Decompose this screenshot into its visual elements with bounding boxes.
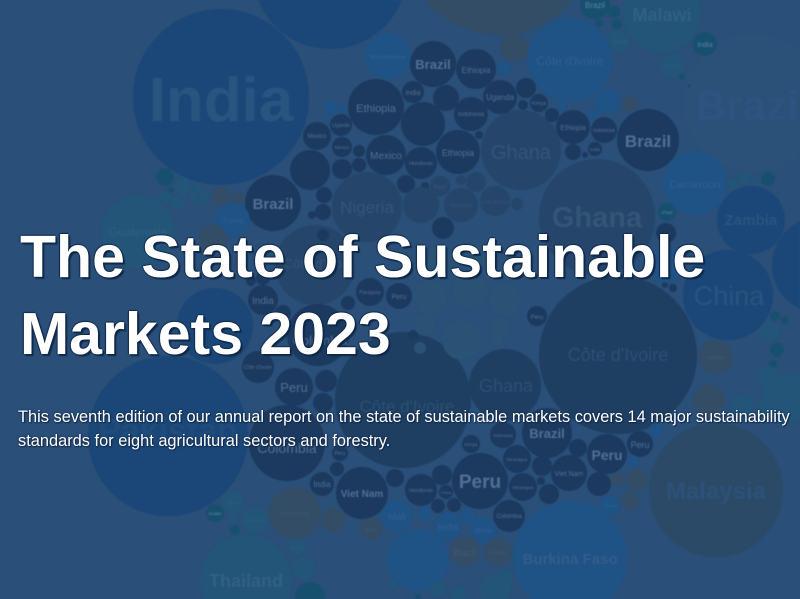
intro paragraph: standards for eight agricultural sectors and forestry. xyxy=(18,432,390,450)
bubble: India small: India xyxy=(405,90,421,97)
olive bubbles xyxy=(199,34,733,566)
bubble: Viet Nam xyxy=(336,467,388,519)
bubble: Ethiopia middle xyxy=(436,130,480,174)
bubble: India large xyxy=(133,9,309,185)
bubble: Peru grey: Peru xyxy=(434,185,446,191)
bubble: Malaysia: Malaysia xyxy=(666,478,767,505)
bubble: Ghana upper: Ghana xyxy=(491,142,552,164)
bubble: Peru tiny right: Peru xyxy=(630,440,650,450)
bubble: Thailand xyxy=(200,534,292,599)
bubble: Mexico small left: Mexico xyxy=(307,134,327,140)
bubble: Ghana large xyxy=(539,159,655,275)
bubble: Turkey: Turkey xyxy=(222,218,244,225)
bubble: olive Brazil xyxy=(450,536,480,566)
bubble: olive Colombia xyxy=(699,340,733,374)
bubble: Chad xyxy=(658,203,676,221)
bubble: Peru lower right xyxy=(587,434,627,474)
bubble: India tiny xyxy=(588,142,602,156)
bubble: Nicaragua lower xyxy=(509,473,537,501)
bubble: Indonesia lower xyxy=(490,422,516,448)
bubble: grey-teal small xyxy=(222,491,244,513)
bubble: Ghana lower: Ghana xyxy=(479,376,534,396)
bubble: Brazil right: Brazil xyxy=(625,132,671,151)
bubble: Côte d'Ivoire upper: Côte d'Ivoire xyxy=(536,54,604,68)
bubble: Ghana small: Ghana xyxy=(603,503,617,508)
bubble: Indonesia: Indonesia xyxy=(458,112,485,118)
bubble: Colombia lower: Colombia xyxy=(257,440,317,456)
bubble: Peru right middle xyxy=(527,306,547,326)
bubble: Kenya lower xyxy=(462,435,480,453)
bubble: Indonesia grey: Indonesia xyxy=(450,203,472,209)
bubble: Brazil teal: Brazil xyxy=(585,1,605,10)
bubble: Brazil lower xyxy=(522,408,572,458)
bubble: Nicaragua xyxy=(503,445,531,473)
bubble: India large: India xyxy=(149,66,294,135)
bubble: Ethiopia right: Ethiopia xyxy=(560,125,586,132)
bubble: Uganda teal small xyxy=(289,539,305,555)
bubble: Côte d'Ivoire mid left xyxy=(275,225,356,305)
bubble: Ethiopia middle: Ethiopia xyxy=(442,148,474,158)
bubble: Turkey-adjacent India xyxy=(248,285,278,315)
bubble: Mexico: Mexico xyxy=(370,151,402,162)
bubble: Brazil top: Brazil xyxy=(415,57,451,72)
bubble: Brazil teal xyxy=(580,0,610,19)
bubble: Benin: Benin xyxy=(475,528,493,535)
bubble: Kenya xyxy=(530,94,548,112)
bubble: Uganda small: Uganda xyxy=(332,123,350,129)
title: The State of Sustainable xyxy=(20,224,705,290)
bubble: Mali: Mali xyxy=(388,512,406,523)
bubble: Mozambique xyxy=(365,33,411,79)
bubble: Malawi: Malawi xyxy=(632,5,692,25)
bubble: Ethiopia top: Ethiopia xyxy=(462,66,491,75)
bubble: China: China xyxy=(694,281,765,311)
bubble: olive Dominican Republic: Dominican Rep. xyxy=(279,511,311,516)
faint green-teal cluster xyxy=(413,242,524,360)
bubble: Viet Nam lower: Viet Nam xyxy=(555,471,583,478)
bubble: Sudan dark teal: Sudan xyxy=(208,511,222,516)
bubble: Brazil top xyxy=(410,41,456,87)
bubble: India bottom: India xyxy=(313,480,331,489)
bubble: Peru bottom xyxy=(332,445,348,461)
bubble: Cameroon: Cameroon xyxy=(669,179,721,191)
bubble: top olive xyxy=(404,0,594,35)
bubble: Guatemala xyxy=(101,195,175,269)
bubble: Peru tiny right xyxy=(627,431,653,457)
bubble: Cameroon xyxy=(663,151,727,215)
unlabelled dark bubbles xyxy=(246,78,677,513)
bubble: grey-teal small: Benin xyxy=(227,500,239,505)
bubble: Côte d'Ivoire small: Côte d'Ivoire xyxy=(244,365,272,371)
bubble: Nicaragua lower: Nicaragua xyxy=(513,485,534,490)
bubble: olive Ecuador: Ecuador xyxy=(490,550,507,555)
title: Markets 2023 xyxy=(20,301,391,367)
bubble: blue lower left centre xyxy=(387,529,449,591)
title xyxy=(19,224,706,367)
bubble: Uganda grey-blue xyxy=(608,30,630,52)
bubble: Uganda: Uganda xyxy=(486,93,515,102)
bubble: Colombia upper xyxy=(287,304,349,366)
bubble: Mexico xyxy=(366,135,406,175)
bubble: Uganda grey-blue: Uganda xyxy=(611,39,627,44)
bubble: Thailand: Thailand xyxy=(209,571,283,591)
bubble: Uganda teal small: Uganda xyxy=(290,545,305,550)
bubble: olive Ecuador xyxy=(484,538,512,566)
bubble: Kenya grey-blue xyxy=(660,53,684,77)
bubble: Peru right middle: Peru xyxy=(531,315,543,321)
bubble: Côte d'Ivoire mid left: Côte d'Ivoire xyxy=(284,256,356,271)
bubble: Mexico tiny: Mexico xyxy=(335,145,350,150)
bubble: faint Brazil xyxy=(683,33,800,173)
bubble: Sudan dark teal xyxy=(206,504,224,522)
bubble: top blue xyxy=(253,0,407,49)
bubble: Indonesia right: Indonesia xyxy=(593,128,615,134)
bubble: Colombia teal xyxy=(242,507,268,533)
bubble: Benin xyxy=(471,517,497,543)
bubble: Uganda small xyxy=(330,114,352,136)
intro paragraph xyxy=(18,408,791,451)
bubble: Ghana upper xyxy=(481,110,561,190)
bubble: Zambia xyxy=(717,186,785,254)
bubble: Guatemala: Guatemala xyxy=(109,225,168,239)
bubble: Colombia small: Colombia xyxy=(496,514,522,520)
bubble: Ethiopia large: Ethiopia xyxy=(356,103,397,115)
bubble: Paraguay: Paraguay xyxy=(359,290,381,296)
bubble: Côte d'Ivoire large: Côte d'Ivoire xyxy=(568,345,668,365)
bubble: olive Brazil: Brazil xyxy=(454,548,476,558)
bubble: Uganda xyxy=(483,80,517,114)
intro paragraph: This seventh edition of our annual report on the state of sustainable markets covers 14 major sustainability xyxy=(18,408,790,426)
bubble: Peru small: Peru xyxy=(392,294,406,301)
bubble: olive Brazil small xyxy=(360,518,382,540)
bubble: Peru left: Peru xyxy=(280,380,308,395)
bubble: Brazil right xyxy=(617,109,679,171)
bubble: Colombia upper: Colombia xyxy=(293,333,348,348)
bubble: Ghana lower xyxy=(469,349,541,421)
bubble: Pakistan: Pakistan xyxy=(98,412,238,450)
bubble: Nicaragua: Nicaragua xyxy=(507,457,528,462)
unlabelled teal bubbles xyxy=(156,6,800,599)
bubble: right edge lower blue xyxy=(761,376,800,424)
bubble: Burkina Faso: Burkina Faso xyxy=(522,551,618,568)
bubble: China xyxy=(683,250,773,340)
bubble: Zambia: Zambia xyxy=(725,212,778,229)
bubble: Indonesia xyxy=(454,97,488,131)
bubble: Peru large: Peru xyxy=(459,472,501,493)
bubble: Peru bottom: Peru xyxy=(335,451,345,457)
bubble: Indonesia lower: Indonesia xyxy=(493,433,513,438)
bubble: right edge blue xyxy=(772,217,800,313)
bubble: Peru lower right: Peru xyxy=(591,447,623,463)
bubble: Nigeria xyxy=(332,172,402,242)
bubble: Malawi xyxy=(623,0,701,53)
gray bubbles xyxy=(403,172,523,223)
bubble: Ghana small xyxy=(600,495,620,515)
bubble: Ethiopia right xyxy=(556,110,590,144)
bubble: Chad: Chad xyxy=(662,210,673,215)
bubble: olive Colombia: Colombia xyxy=(706,355,726,360)
bubble: Viet Nam lower xyxy=(551,455,587,491)
bubble: Burkina Faso xyxy=(513,501,627,599)
bubble: blue left middle xyxy=(177,288,253,364)
bubble: China small: China xyxy=(441,490,452,495)
bubble: India blue: India xyxy=(438,522,458,532)
bubble: Colombia small xyxy=(493,500,525,532)
bubble: India teal xyxy=(693,32,717,56)
bubble: Peru left xyxy=(275,368,313,406)
bubble: India tiny: India xyxy=(590,147,600,152)
bubble: Côte d'Ivoire centre: Côte d'Ivoire xyxy=(360,397,454,416)
bubble: India small xyxy=(402,81,424,103)
bubble: Ethiopia top xyxy=(456,49,496,89)
bubble: India bottom xyxy=(310,472,334,496)
bubble: Colombia lower xyxy=(249,405,325,481)
bubble: India blue xyxy=(434,512,462,540)
bubble: Mali xyxy=(381,500,413,532)
bubble: Colombia teal: Colombia xyxy=(245,518,265,523)
bubble: Brazil left: Brazil xyxy=(253,196,293,213)
bubble: Turkey xyxy=(216,203,250,237)
bubble: Paraguay xyxy=(356,278,384,306)
bubble: Nigeria: Nigeria xyxy=(340,198,394,217)
bubble: Mexico small left xyxy=(303,122,331,150)
bubble: Côte d'Ivoire grey: Côte d'Ivoire xyxy=(481,200,509,206)
bubble: Mexico tiny xyxy=(332,137,352,157)
bubble: Côte d'Ivoire centre xyxy=(335,332,471,468)
bubble: Honduras lower: Honduras xyxy=(409,488,433,494)
bubble: olive Dominican Republic xyxy=(269,487,321,539)
bubble: India teal: India xyxy=(697,42,713,49)
bubble: Mozambique: Mozambique xyxy=(369,54,407,61)
bubble: Pakistan xyxy=(88,356,248,516)
bubble: Côte d'Ivoire large xyxy=(539,276,697,434)
bubble: Honduras lower xyxy=(405,474,437,506)
bubble: Honduras: Honduras xyxy=(409,161,433,167)
bubble: Honduras xyxy=(405,147,437,179)
bubble: Brazil left xyxy=(245,175,301,231)
bubble: Malaysia xyxy=(649,423,783,557)
bubble: Viet Nam: Viet Nam xyxy=(341,489,383,500)
unlabelled olive bubbles xyxy=(199,34,725,532)
bubble: Ghana large: Ghana xyxy=(552,202,643,234)
bubble: Kenya lower: Kenya xyxy=(465,442,478,447)
bubble: Côte d'Ivoire upper xyxy=(528,18,612,102)
bubble: Kenya grey-blue: Kenya xyxy=(666,63,679,68)
bubble: olive Brazil small: Brazil xyxy=(365,527,377,532)
bubble: China small xyxy=(439,485,453,499)
bubble: Turkey-adjacent India: India xyxy=(252,296,274,307)
unlabelled grey bubbles xyxy=(403,172,523,223)
bubble: Indonesia right xyxy=(591,117,617,143)
bubble: Ethiopia large xyxy=(348,79,404,135)
bubble: Côte d'Ivoire small xyxy=(242,351,274,383)
bubble: Peru small xyxy=(386,283,412,309)
bubble: Kenya: Kenya xyxy=(532,101,546,107)
bubble: Peru large xyxy=(452,453,508,509)
bubble: Brazil lower: Brazil xyxy=(529,426,565,441)
dark bubbles with country labels xyxy=(242,41,679,532)
